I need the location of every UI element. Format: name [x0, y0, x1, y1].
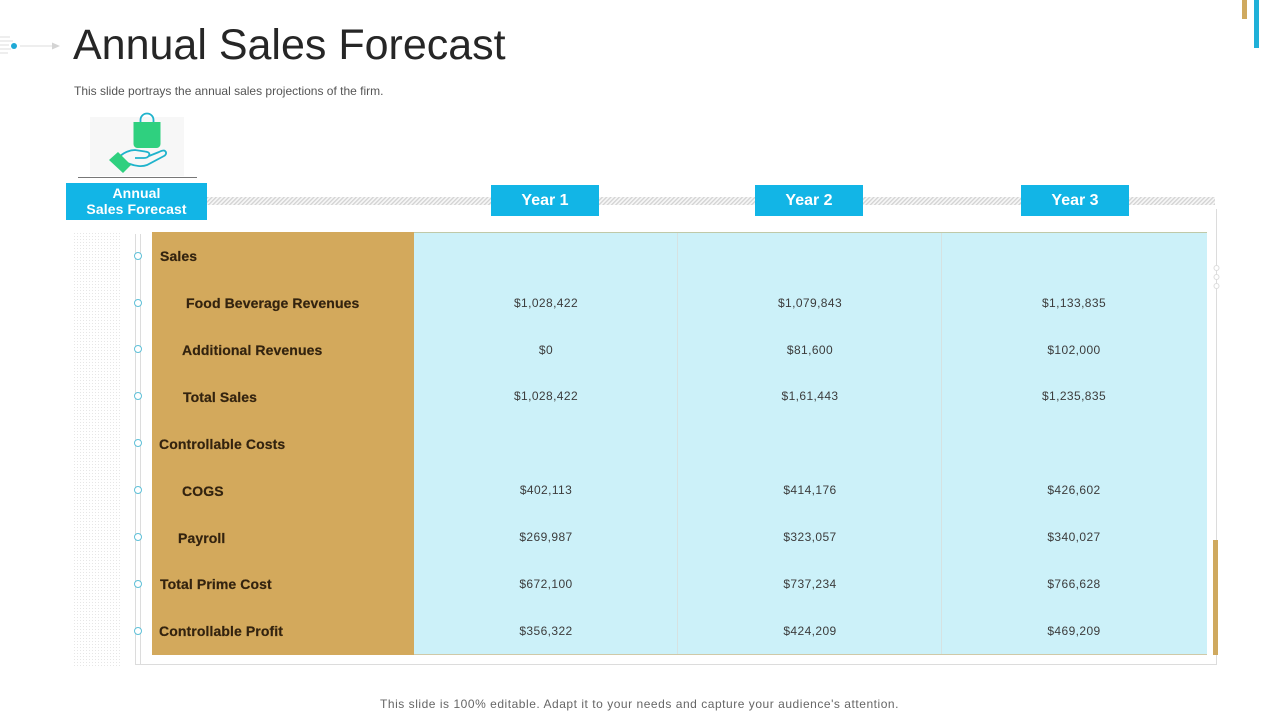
label: Controllable Profit: Controllable Profit [159, 623, 283, 639]
header: year 2 [755, 185, 863, 216]
value: $1,61,443 [782, 389, 838, 403]
icon: hand holding shopping bag [78, 112, 197, 178]
value: $1,079,843 [778, 296, 842, 310]
value: $81,600 [787, 343, 833, 357]
subtitle: This slide portrays the annual sales projections of the firm. [74, 84, 383, 98]
value: $469,209 [1047, 624, 1101, 638]
column divider [941, 233, 942, 654]
hatched header band [207, 197, 1215, 205]
header: year 2: Year 2 [785, 192, 833, 209]
values: row profit: $356,322 [519, 624, 573, 638]
values: row additional: $0 [539, 343, 553, 357]
value: $424,209 [783, 624, 837, 638]
footer note: This slide is 100% editable. Adapt it to your needs and capture your audience's attention. [380, 697, 899, 711]
header: year 3 [1021, 185, 1129, 216]
label: Additional Revenues: Additional Revenues [182, 342, 322, 358]
top gold accent [1242, 0, 1247, 19]
header: year 3: Year 3 [1051, 192, 1099, 209]
label: Payroll: Payroll [178, 530, 225, 546]
value: $340,027 [1047, 530, 1101, 544]
values: row food beverage: $1,028,422 [514, 296, 578, 310]
dotted texture panel [74, 233, 120, 666]
title: Annual Sales Forecast [73, 21, 506, 69]
column divider [677, 233, 678, 654]
values: row total sales: $1,028,422 [514, 389, 578, 403]
value: $766,628 [1047, 577, 1101, 591]
value: $1,235,835 [1042, 389, 1106, 403]
frame bottom line [135, 664, 1217, 665]
header: annual sales forecast: Sales Forecast [86, 201, 187, 217]
label: Food Beverage Revenues: Food Beverage Revenues [186, 295, 359, 311]
values: row cogs: $402,113 [520, 483, 572, 497]
label: Total Sales: Total Sales [183, 389, 257, 405]
top blue accent [1254, 0, 1259, 48]
header: annual sales forecast: Annual [112, 185, 161, 201]
label: Controllable Costs: Controllable Costs [159, 436, 285, 452]
row markers [134, 252, 142, 635]
value: $426,602 [1047, 483, 1101, 497]
label: Sales: Sales [160, 248, 197, 264]
right small circles [1214, 265, 1220, 289]
values: row prime cost: $672,100 [519, 577, 573, 591]
header: year 1: Year 1 [521, 192, 569, 209]
panel: row labels [152, 232, 414, 655]
label: Total Prime Cost: Total Prime Cost [160, 576, 272, 592]
value: $323,057 [783, 530, 837, 544]
value: $414,176 [783, 483, 837, 497]
value: $1,133,835 [1042, 296, 1106, 310]
frame right line [1216, 209, 1217, 665]
values: row payroll: $269,987 [519, 530, 573, 544]
decorative arrow marker [0, 36, 60, 54]
value: $102,000 [1047, 343, 1101, 357]
right gold accent bar [1213, 540, 1218, 655]
frame lines [135, 234, 141, 664]
header: year 1 [491, 185, 599, 216]
panel: values [414, 232, 1207, 655]
label: COGS: COGS [182, 483, 224, 499]
header: annual sales forecast [66, 183, 207, 220]
value: $737,234 [783, 577, 837, 591]
